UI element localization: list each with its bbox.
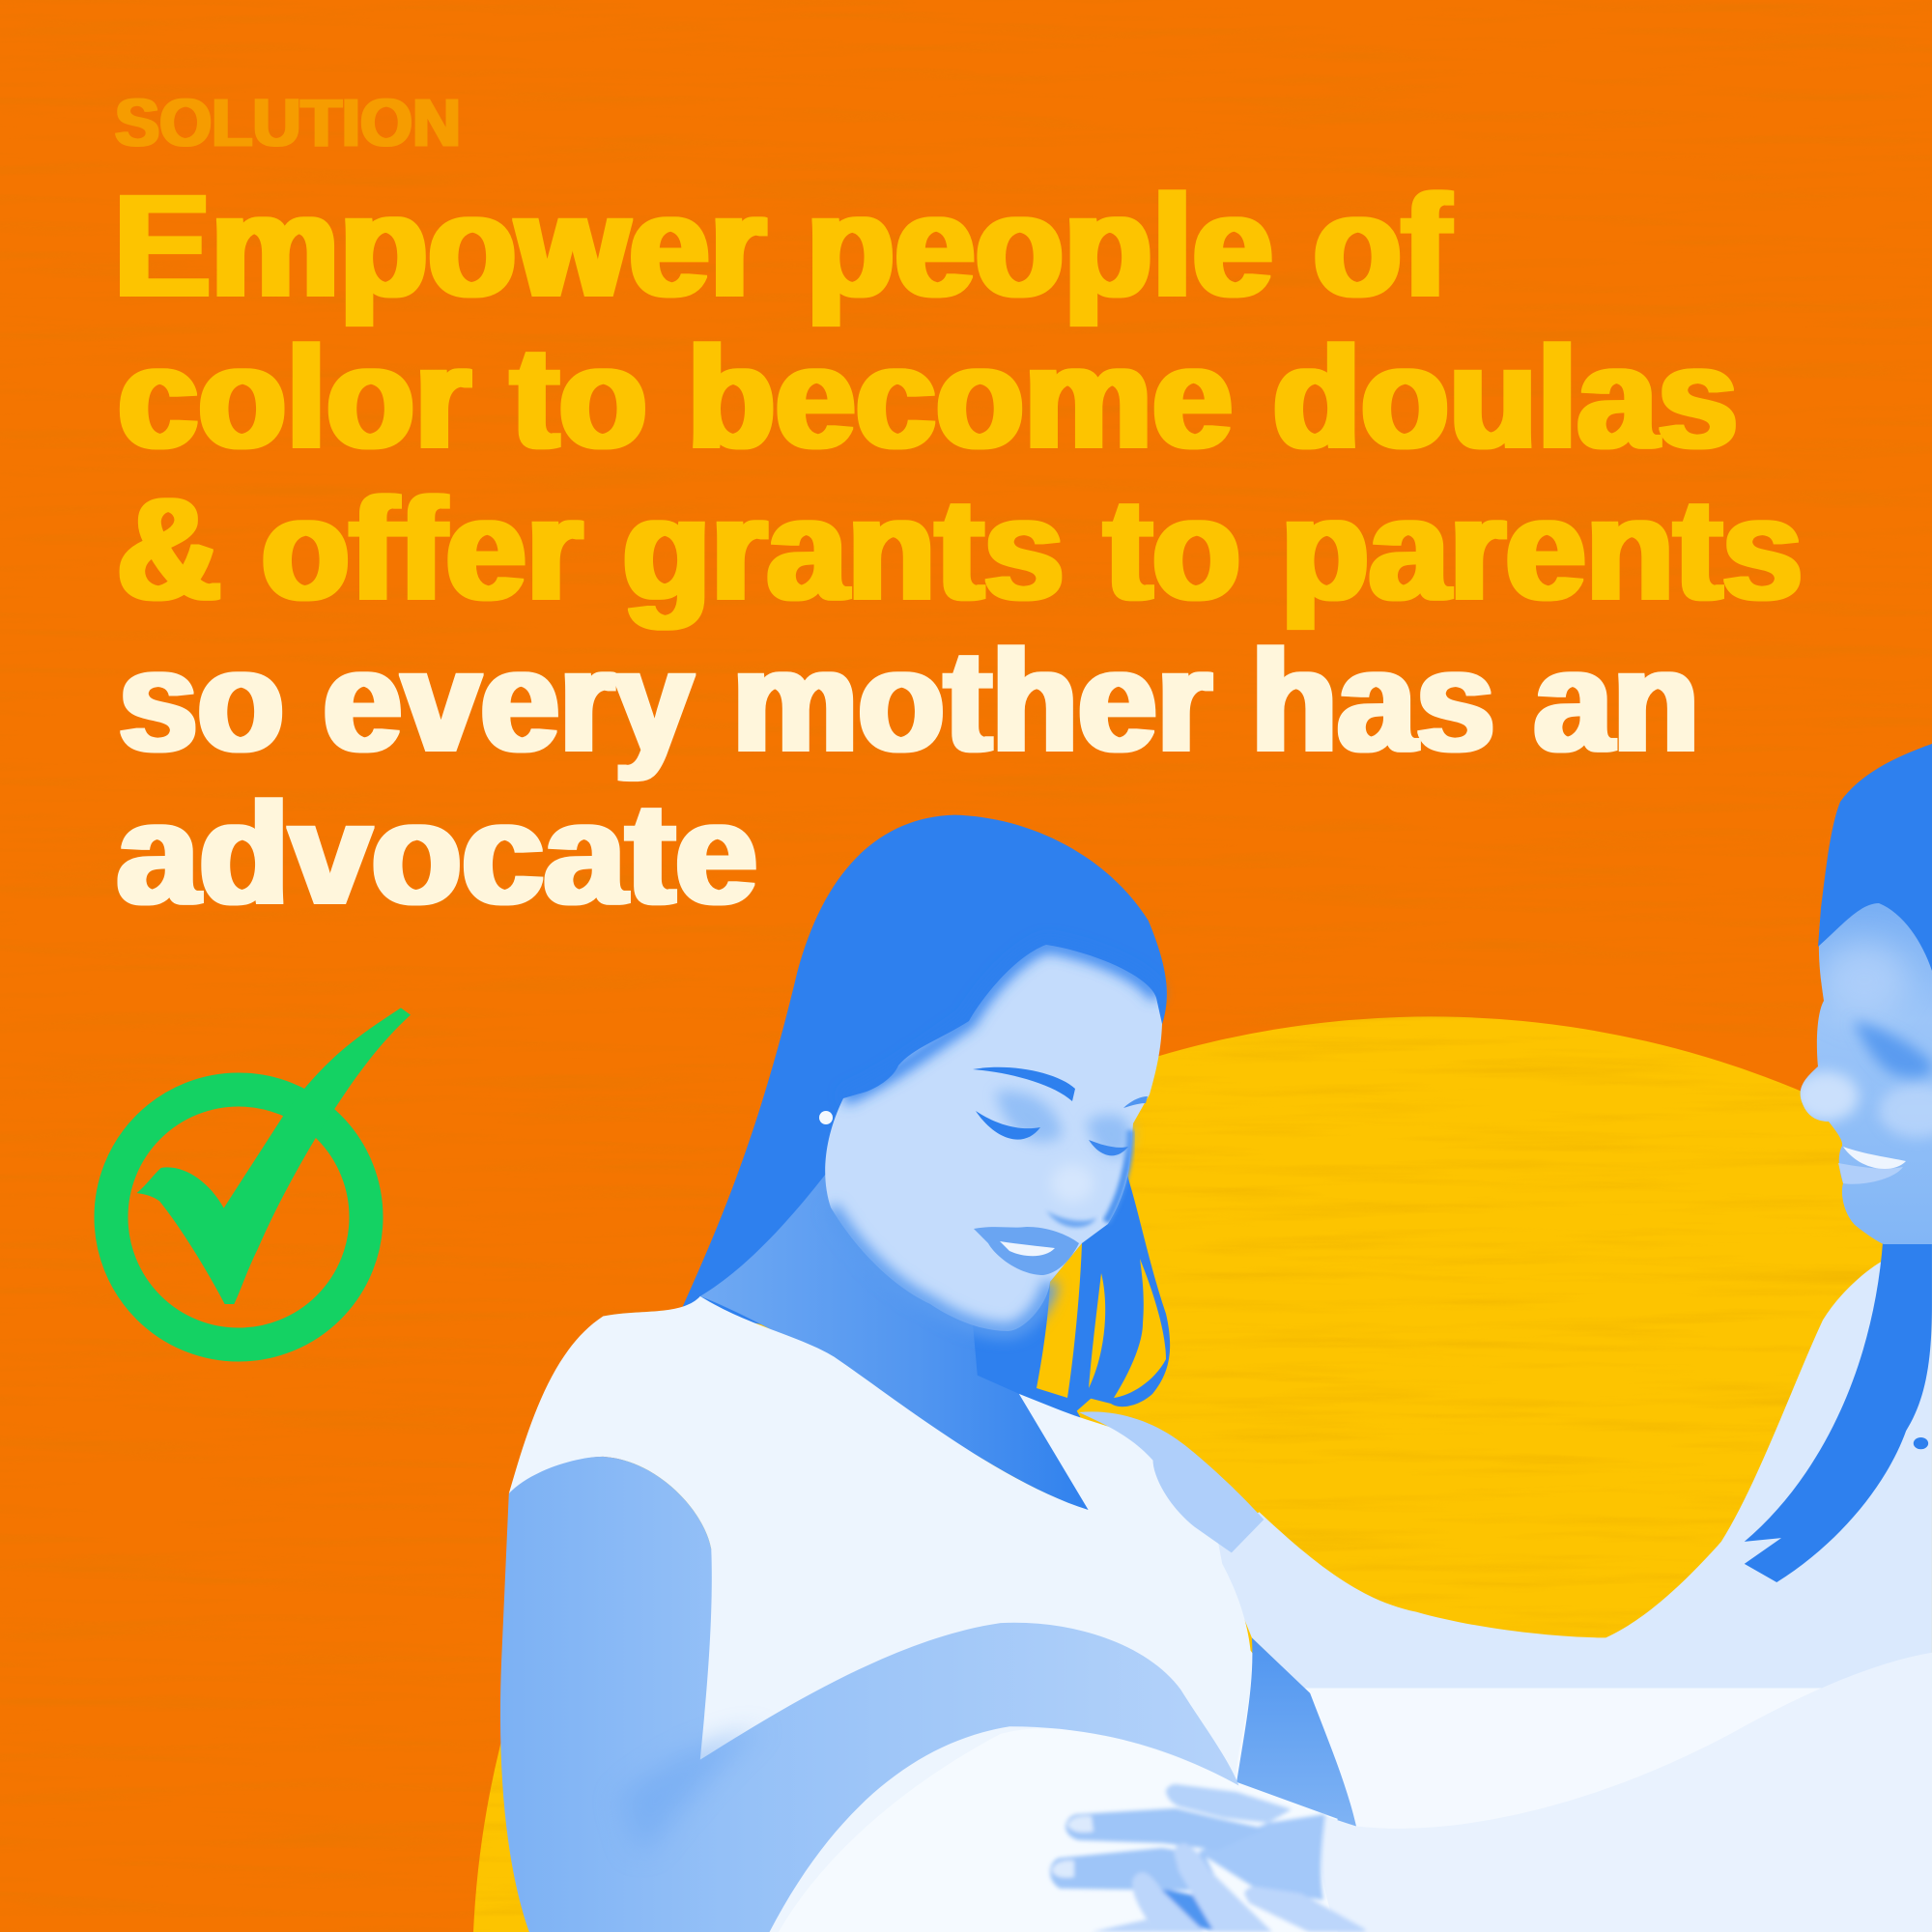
eye-socket shading — [995, 1091, 1132, 1157]
helper: hair top — [1818, 744, 1932, 971]
fifth finger — [1132, 1872, 1205, 1932]
jaw shading — [831, 1208, 1050, 1331]
right brow — [1123, 1096, 1148, 1108]
helper: far arm and torso — [1213, 1238, 1932, 1697]
mother: hair tail — [1024, 1150, 1170, 1406]
white clothing behind belly — [1204, 1586, 1932, 1932]
low finger — [1092, 1919, 1156, 1932]
helper: forehead highlight — [1821, 942, 1908, 1019]
helper: near hand on shoulder — [1079, 1411, 1264, 1552]
back of hand — [1198, 1814, 1325, 1900]
headline line 1: Empower people of — [114, 164, 1451, 327]
icon: green check in circle — [111, 1008, 411, 1345]
helper: lower hair and shirt button — [1745, 1240, 1932, 1582]
nose shadow — [1046, 1210, 1096, 1228]
fourth finger — [1174, 1843, 1272, 1932]
mother: shirt — [509, 1296, 1252, 1932]
helper: hand on belly — [1050, 1784, 1365, 1932]
mother: belly side shadow — [1236, 1637, 1356, 1827]
helper: head — [1793, 744, 1932, 1244]
mother: elbow crease shading — [621, 1726, 760, 1860]
helper: hair lower — [1745, 1240, 1932, 1582]
check ring — [111, 1090, 366, 1345]
helper: nose highlight — [1793, 1071, 1859, 1122]
mother: under-chin shadow — [927, 1294, 1082, 1420]
headline — [114, 164, 1803, 934]
headline line 4: so every mother has an — [119, 619, 1699, 781]
teeth — [1000, 1241, 1055, 1256]
right cheek edge shading — [1106, 1130, 1130, 1222]
helper: facial shading, clipped to the face — [1793, 942, 1932, 1138]
helper: eye shadow — [1853, 1021, 1932, 1077]
helper: cheek highlight — [1879, 1084, 1932, 1138]
body layers of the mother — [500, 1296, 1932, 1932]
helper: smile lip — [1838, 1163, 1903, 1184]
yellow sun circle — [473, 1016, 1932, 1932]
headline line 3: & offer grants to parents — [117, 468, 1803, 630]
photo: pregnant woman and doula in blue duotone — [500, 744, 1932, 1932]
helper: teeth — [1843, 1147, 1906, 1169]
second finger — [1065, 1808, 1265, 1850]
nose highlight — [1051, 1164, 1094, 1203]
earring — [819, 1111, 833, 1124]
lips — [974, 1227, 1079, 1275]
mother: arm and hand — [500, 1457, 1238, 1932]
top finger — [1166, 1784, 1292, 1823]
yellow gaps between hair strands — [1037, 1243, 1166, 1398]
helper: face — [1801, 869, 1932, 1244]
mother: neck — [700, 1157, 1093, 1512]
mother: belly — [779, 1728, 1338, 1932]
hairline shading — [843, 945, 1156, 1098]
finger shadows — [1154, 1889, 1219, 1932]
mother: hair — [682, 815, 1167, 1413]
headline line 5: advocate — [117, 772, 757, 934]
headline line 2: color to become doulas — [118, 316, 1738, 478]
back layers of the figures — [682, 815, 1932, 1932]
third finger — [1050, 1848, 1217, 1890]
helper: shirt button — [1914, 1437, 1928, 1449]
right eye — [1089, 1140, 1128, 1155]
kicker label: SOLUTION — [115, 85, 461, 160]
left eye — [976, 1111, 1040, 1140]
left brow — [973, 1067, 1075, 1101]
fingernails — [1052, 1816, 1094, 1878]
check mark — [137, 1008, 411, 1304]
helper: sleeve front arm — [1321, 1653, 1932, 1932]
thumb — [1244, 1887, 1365, 1932]
mother: face — [819, 945, 1162, 1331]
face base — [825, 945, 1162, 1331]
